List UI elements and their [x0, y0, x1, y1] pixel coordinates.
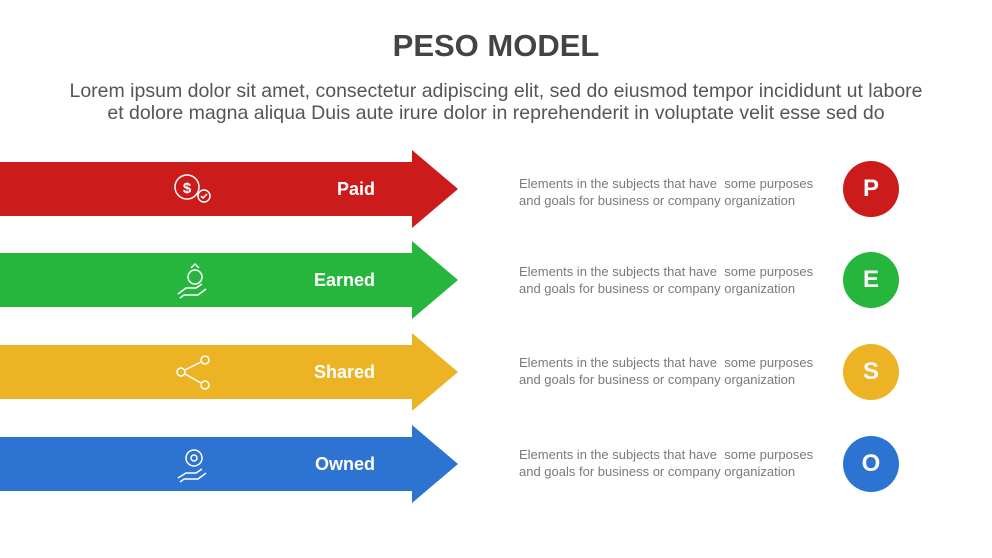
arrow: Owned: Owned — [315, 454, 375, 474]
arrow: Paid: $ — [183, 180, 192, 197]
subtitle: et dolore magna aliqua Duis aute irure dolor in reprehenderit in voluptate velit esse sed do — [107, 102, 885, 124]
description: Owned — [519, 447, 813, 479]
description: Shared — [519, 355, 813, 387]
circle: S: S — [863, 358, 879, 385]
subtitle: Lorem ipsum dolor sit amet, consectetur adipiscing elit, sed do eiusmod tempor incididunt ut labore — [69, 80, 923, 102]
description: Owned: and goals for business or company organization — [519, 464, 795, 479]
arrow: Owned — [0, 425, 458, 503]
icon: money bag hand — [178, 264, 206, 298]
icon: dollar coin — [175, 175, 210, 202]
arrow: Shared — [0, 333, 458, 411]
arrow: Paid — [0, 150, 458, 228]
description: Paid: Elements in the subjects that have some purposes — [519, 176, 813, 191]
arrow: Shared: Shared — [314, 362, 375, 382]
circle: O — [843, 436, 899, 492]
arrow: Earned — [0, 241, 458, 319]
description: Paid: and goals for business or company organization — [519, 193, 795, 208]
description: Shared: Elements in the subjects that have some purposes — [519, 355, 813, 370]
description: Earned: Elements in the subjects that have some purposes — [519, 264, 813, 279]
description: Shared: and goals for business or company organization — [519, 372, 795, 387]
description: Earned — [519, 264, 813, 296]
circle: S — [843, 344, 899, 400]
circle: O: O — [862, 450, 880, 477]
circle: E — [843, 252, 899, 308]
circle: P — [843, 161, 899, 217]
arrows — [0, 150, 458, 503]
circle: E: E — [863, 266, 879, 293]
arrow: Paid: Paid — [337, 179, 375, 199]
circle: P: P — [863, 175, 879, 202]
description: Owned: Elements in the subjects that have some purposes — [519, 447, 813, 462]
arrow: Earned: Earned — [314, 270, 375, 290]
icon: share — [177, 356, 209, 389]
description: Paid — [519, 176, 813, 208]
icon: gear hand — [178, 450, 206, 482]
title: PESO MODEL — [393, 28, 599, 63]
subtitle — [69, 80, 923, 124]
description: Earned: and goals for business or company organization — [519, 281, 795, 296]
